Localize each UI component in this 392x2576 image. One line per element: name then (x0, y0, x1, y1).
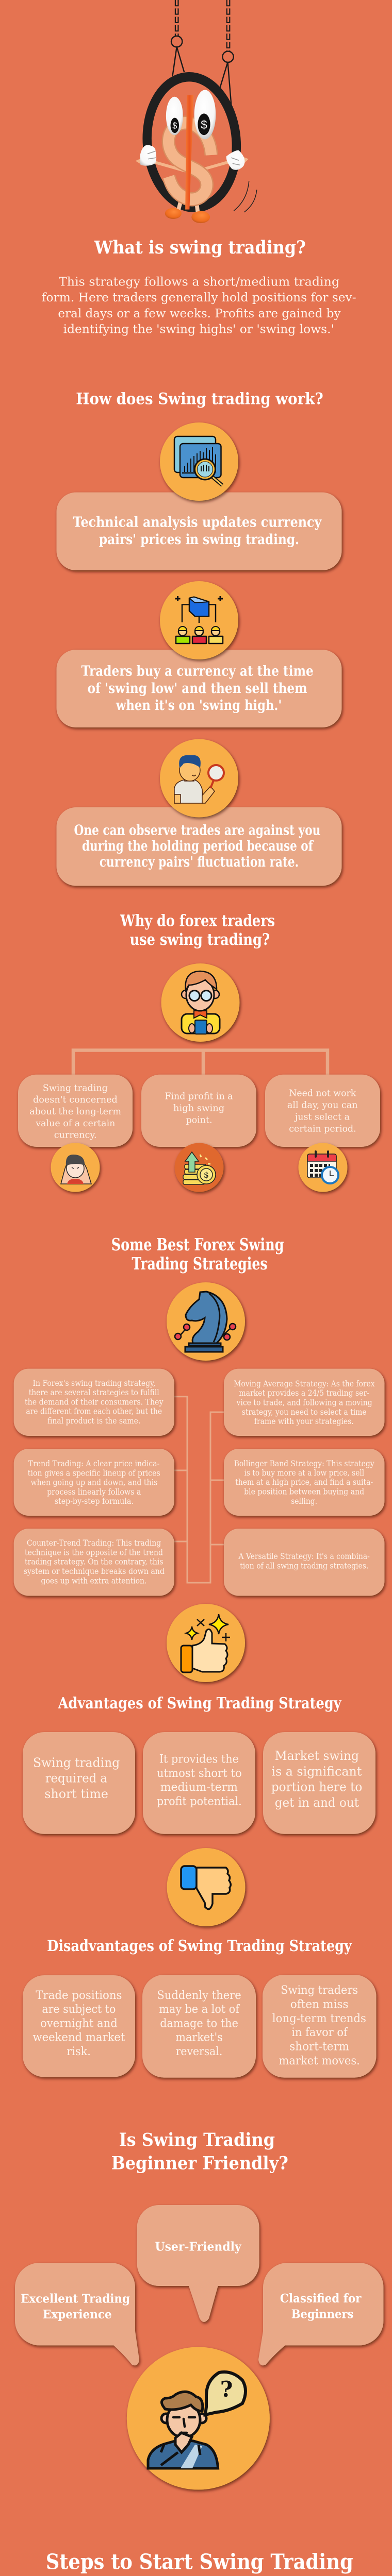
icon circle: thinking beginner (127, 2347, 270, 2489)
heading: some best strategies: Trading Strategies (132, 1253, 268, 1274)
panel: traders buy (57, 581, 341, 727)
text: Swing traders (281, 1984, 358, 1997)
panel: moving average strategy (224, 1369, 385, 1436)
text: reversal. (176, 2045, 222, 2058)
text: card 3 (287, 1088, 358, 1134)
text: swing trading definition (42, 276, 356, 336)
text: Experience (43, 2308, 112, 2321)
heading: some best strategies: Some Best Forex Swing (111, 1234, 284, 1255)
card: high swing profit (141, 1075, 256, 1192)
text: traders buy: when it's on 'swing high.' (116, 698, 282, 714)
text: vice to trade, and following a moving (236, 1398, 372, 1408)
text (33, 1989, 125, 2058)
panel: trend trading (14, 1449, 174, 1516)
text: technical analysis: pairs' prices in swing trading. (99, 532, 299, 548)
text: weekend market (33, 2031, 125, 2044)
panel: versatile strategy (224, 1529, 385, 1596)
text (280, 2292, 362, 2321)
text: Excellent Trading (21, 2292, 130, 2306)
text: process linearly follows a (47, 1487, 141, 1497)
text: card 2: point. (186, 1115, 213, 1126)
panel: technical analysis (57, 422, 341, 570)
icon circle: coins and arrow: $ (204, 1170, 209, 1180)
text: in favor of (291, 2026, 349, 2039)
text: long-term trends (272, 2012, 366, 2025)
heading: is swing trading beginner friendly: Beginner Friendly? (111, 2153, 288, 2174)
text: technical analysis (73, 514, 322, 548)
arms (150, 161, 233, 171)
text: card 1: currency. (54, 1130, 97, 1141)
icon circle: thumbs down (167, 1848, 246, 1926)
text: A Versatile Strategy: It's a combina- (238, 1552, 370, 1561)
text: observe trades: during the holding period because of (82, 838, 314, 854)
card: long-term value (18, 1075, 133, 1192)
text: damage to the (160, 2018, 238, 2030)
text (234, 1459, 374, 1506)
card: advantage 1 (23, 1732, 135, 1834)
text: when going up and down, and this (31, 1478, 157, 1487)
text (271, 1749, 362, 1810)
text: system or technique breaks down and (24, 1567, 165, 1576)
speech bubble: user-friendly (137, 2205, 259, 2322)
text: card 2: Find profit in a (165, 1091, 233, 1102)
text: is to buy more at a low price, sell (244, 1468, 364, 1478)
text: traders buy: Traders buy a currency at the time (81, 664, 314, 680)
text (24, 1538, 165, 1586)
icon circle: network of traders (160, 581, 238, 659)
text: Trend Trading: A clear price indica- (28, 1459, 159, 1468)
text (157, 1753, 242, 1808)
text: Suddenly there (157, 1989, 241, 2002)
text: Swing trading (33, 1756, 120, 1770)
icon circle: stressed trader (51, 1143, 100, 1192)
panel: observe trades (57, 739, 341, 886)
icon circle: chart analysis (160, 422, 238, 501)
text: card 1: value of a certain (35, 1118, 116, 1129)
heading: steps to start: Steps to Start Swing Trading (46, 2550, 353, 2574)
text: get in and out (275, 1795, 359, 1810)
text: card 1: about the long-term (29, 1106, 121, 1117)
heading: why do forex traders: use swing trading? (130, 930, 270, 949)
text: Bollinger Band Strategy: This strategy (234, 1459, 374, 1468)
text: risk. (67, 2045, 91, 2058)
text: often miss (290, 1998, 349, 2011)
text: selling. (291, 1497, 317, 1506)
card: advantage 2 (143, 1732, 255, 1834)
text: Market swing (275, 1749, 359, 1763)
text: observe trades: One can observe trades are against you (74, 822, 320, 838)
icon circle: coins and arrow (174, 1143, 224, 1192)
text: goes up with extra attention. (41, 1577, 146, 1586)
text: utmost short to (157, 1767, 242, 1780)
text: Counter-Trend Trading: This trading (27, 1538, 161, 1548)
panel: in forex's swing trading (14, 1369, 174, 1436)
text: profit potential. (157, 1795, 242, 1808)
heading: why do forex traders: Why do forex traders (120, 911, 275, 930)
text: Moving Average Strategy: As the forex (234, 1379, 375, 1388)
motion lines (234, 181, 257, 212)
text: technical analysis: Technical analysis updates currency (73, 514, 322, 530)
eyes: $ (172, 121, 177, 131)
text: medium-term (160, 1781, 238, 1794)
shoes (165, 208, 182, 219)
heading: is swing trading beginner friendly (111, 2129, 288, 2174)
icon circle: nerd trader (161, 963, 239, 1042)
text: short time (44, 1787, 108, 1801)
text (238, 1552, 370, 1570)
text: card 3: Need not work (289, 1088, 356, 1098)
chains (171, 0, 234, 105)
text: there are several strategies to fulfill (29, 1388, 159, 1397)
text (33, 1756, 120, 1801)
text: technique is the opposite of the trend (25, 1548, 163, 1557)
text: market's (175, 2031, 223, 2044)
gloves (136, 145, 249, 170)
text: trading strategy. On the contrary, this (25, 1557, 164, 1567)
card: disadvantage 3 (263, 1975, 377, 2078)
text: swing trading definition: eral days or a few weeks. Profits are gained by (58, 307, 341, 320)
text: is a significant (271, 1764, 362, 1778)
icon circle: thumbs up (167, 1604, 245, 1682)
card: advantage 3 (263, 1732, 375, 1834)
card: select a period (265, 1075, 380, 1192)
text: market provides a 24/5 trading ser- (239, 1388, 369, 1398)
heading: is swing trading beginner friendly: Is Swing Trading (119, 2129, 275, 2150)
text: swing trading definition: identifying the 'swing highs' or 'swing lows.' (63, 323, 334, 336)
text: card 1 (29, 1082, 121, 1141)
text: are subject to (42, 2003, 116, 2016)
panel: bollinger band strategy (224, 1449, 385, 1516)
text: Trade positions (36, 1989, 122, 2002)
center bar (185, 95, 193, 210)
text: may be a lot of (159, 2003, 240, 2016)
panel: counter-trend trading (14, 1529, 174, 1596)
swing ring (142, 73, 241, 211)
text (157, 1989, 241, 2058)
text (234, 1379, 375, 1426)
text (28, 1459, 160, 1506)
text: observe trades: currency pairs' fluctuation rate. (100, 854, 299, 870)
text: short-term (289, 2041, 349, 2054)
text: portion here to (271, 1780, 362, 1794)
icon circle: thinking beginner: ? (220, 2377, 233, 2402)
text: overnight and (40, 2018, 118, 2030)
text (272, 1984, 366, 2067)
heading: some best strategies (111, 1234, 284, 1274)
text: Beginners (291, 2307, 353, 2321)
text: market moves. (279, 2055, 360, 2067)
text: traders buy (81, 664, 314, 714)
text: Classified for (280, 2292, 362, 2306)
text: card 3: certain period. (289, 1123, 356, 1134)
card: disadvantage 2 (142, 1975, 256, 2078)
text: It provides the (159, 1753, 239, 1766)
heading: how does swing trading work: How does Swing trading work? (76, 390, 323, 409)
eyes: $ (201, 117, 207, 131)
heading: advantages: Advantages of Swing Trading Strategy (58, 1694, 342, 1713)
text: observe trades (74, 822, 320, 870)
legs (178, 197, 198, 214)
icon circle: man with magnifier (160, 739, 238, 817)
text: card 3: just select a (294, 1112, 350, 1122)
connectors: strategy lines (174, 1397, 224, 1583)
text: card 2 (165, 1091, 233, 1126)
text: User-Friendly (155, 2240, 241, 2253)
text: them at a high price, and find a suita- (235, 1478, 373, 1487)
text: card 1: Swing trading (43, 1082, 108, 1093)
text: In Forex's swing trading strategy, (33, 1379, 156, 1388)
text: the demand of their consumers. They (25, 1397, 164, 1406)
speech bubble: excellent trading experience (15, 2263, 139, 2365)
connector: why tree (73, 1050, 328, 1075)
text: card 3: all day, you can (287, 1099, 358, 1111)
text: traders buy: of 'swing low' and then sell them (88, 681, 307, 697)
text: final product is the same. (47, 1416, 140, 1426)
text: tion gives a specific lineup of prices (28, 1468, 160, 1478)
text (21, 2292, 130, 2321)
text: swing trading definition: form. Here traders generally hold positions for sev- (42, 291, 356, 304)
icon circle: chess knight (167, 1282, 245, 1361)
dollar body (169, 123, 211, 199)
text (25, 1379, 164, 1426)
text: card 2: high swing (173, 1103, 224, 1114)
text: step-by-step formula. (55, 1497, 134, 1506)
text: swing trading definition: This strategy follows a short/medium trading (59, 276, 339, 289)
eyes (166, 90, 216, 139)
mascot: dollar character on a swing (136, 0, 257, 223)
text: strategy, you need to select a time (242, 1408, 367, 1417)
text: required a (45, 1771, 107, 1786)
text: ble position between buying and (244, 1487, 364, 1496)
speech bubble: classified for beginners (258, 2263, 384, 2365)
card: disadvantage 1 (23, 1975, 135, 2077)
text: frame with your strategies. (254, 1417, 354, 1426)
heading: why do forex traders (120, 911, 275, 949)
text: tion of all swing trading strategies. (240, 1561, 368, 1570)
icon circle: calendar and clock (298, 1143, 348, 1192)
text: card 1: doesn't concerned (33, 1094, 118, 1105)
heading: what is swing trading: What is swing trading? (94, 237, 306, 258)
text: are different from each other, but the (26, 1406, 162, 1416)
